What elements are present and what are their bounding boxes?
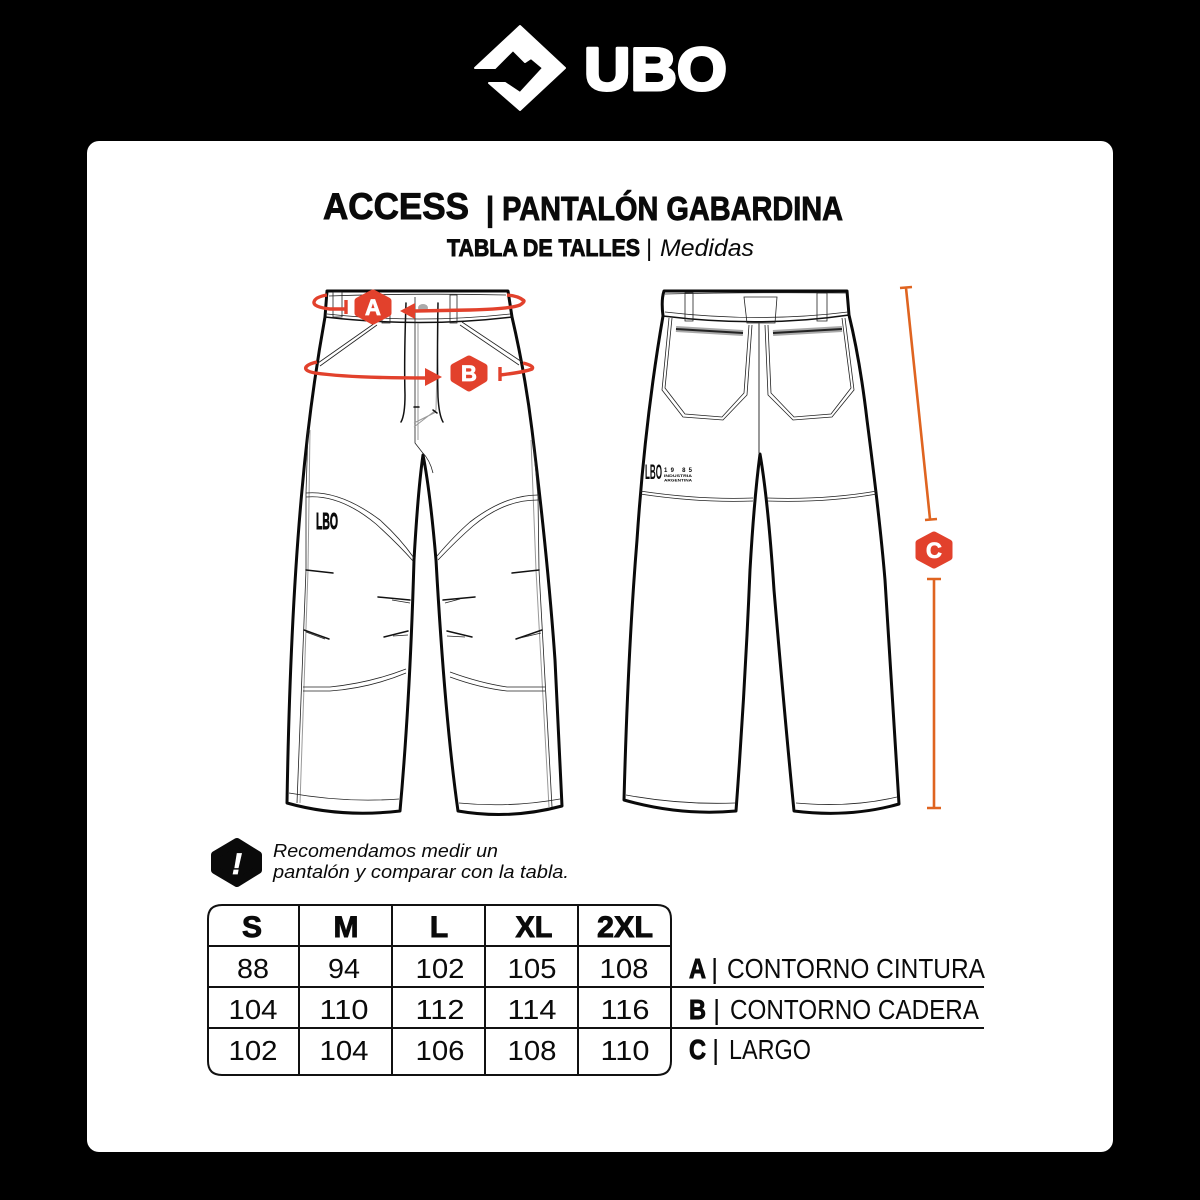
legend B: |: [713, 994, 720, 1025]
row C values: 102: [228, 1035, 278, 1066]
back label: LBO: [645, 461, 662, 484]
pockets: [318, 322, 522, 366]
label year: 19 85: [664, 468, 693, 474]
legend C: C: [689, 1034, 706, 1065]
icon: warning: [215, 842, 258, 883]
front pants drawing: [287, 291, 562, 815]
waistband: [325, 292, 512, 323]
back pockets: [662, 318, 854, 420]
subtitle: measures: Medidas: [660, 235, 754, 262]
size headers: L: [430, 911, 448, 944]
row A values: 105: [508, 953, 556, 984]
subtitle divider: |: [646, 235, 652, 262]
row A values: 102: [416, 953, 464, 984]
tip line one: Recomendamos medir un: [273, 841, 498, 861]
size headers: S: [242, 911, 262, 944]
length line upper: [900, 287, 937, 520]
badge C: [919, 535, 949, 565]
hip arrowhead: [425, 368, 442, 386]
title: [323, 186, 843, 262]
size headers: XL: [516, 911, 552, 944]
back outline: [624, 291, 899, 813]
tip line two: pantalón y comparar con la tabla.: [272, 862, 569, 882]
legend A: |: [711, 953, 718, 984]
legend A: A: [689, 953, 706, 984]
fly and pleats: [401, 297, 443, 473]
row B values: 112: [416, 994, 464, 1025]
waist end cap: [344, 300, 348, 314]
measure legend: [689, 953, 985, 1065]
label line one: INDUSTRIA: [664, 473, 692, 478]
hem stitching: [289, 793, 560, 805]
badge C: C: [926, 538, 942, 563]
row B values: 104: [228, 994, 278, 1025]
row C values: 108: [508, 1035, 556, 1066]
size headers: 2XL: [597, 911, 653, 944]
brand wordmark: UBO: [584, 36, 727, 103]
badge A: [358, 293, 388, 321]
side seams: [297, 430, 552, 807]
legend C: [689, 1034, 811, 1065]
hem stitching: [626, 795, 897, 805]
subtitle: TABLA DE TALLES: [447, 235, 640, 262]
row A values: [237, 953, 648, 984]
size headers: M: [334, 911, 358, 944]
size headers: [242, 911, 653, 944]
size table: [208, 905, 984, 1075]
knee panels: [306, 493, 540, 561]
title: product name: ACCESS: [323, 186, 469, 227]
row C values: 106: [416, 1035, 464, 1066]
center seam: [758, 323, 760, 453]
badge A: A: [365, 295, 381, 320]
table grid: [208, 905, 984, 1075]
knee darts: [304, 570, 542, 639]
callout: measuring tip: [215, 841, 569, 883]
row B values: 116: [600, 994, 650, 1025]
front outline: [287, 291, 562, 815]
back zips: [676, 329, 842, 333]
row B values: [228, 994, 650, 1025]
waistband: [663, 293, 849, 323]
legend B: B: [689, 994, 706, 1025]
arrow: waist contour: [314, 295, 524, 311]
measure A: waist: [314, 293, 524, 321]
badge B: B: [461, 361, 477, 386]
badge B: [454, 359, 484, 388]
legend C: LARGO: [729, 1034, 811, 1065]
size guide infographic: LBO: [316, 508, 338, 534]
row A values: 94: [328, 953, 360, 984]
icon: warning: !: [232, 848, 242, 881]
logo: [475, 26, 727, 110]
row A values: 108: [600, 953, 648, 984]
icon: diamond brand mark: [475, 26, 565, 110]
measure B: hip: [306, 359, 533, 388]
legend C: |: [712, 1034, 719, 1065]
legend A: CONTORNO CINTURA: [727, 953, 985, 984]
measure C: length: [900, 287, 949, 808]
panel: white card: [87, 141, 1113, 1152]
label line two: ARGENTINA: [664, 478, 692, 482]
yoke seam: [640, 491, 877, 501]
length line lower: [927, 579, 941, 808]
row B values: 110: [320, 994, 368, 1025]
lower leg seams: [303, 669, 545, 691]
legend B: CONTORNO CADERA: [730, 994, 979, 1025]
hip end cap: [498, 367, 502, 381]
row C values: 104: [320, 1035, 368, 1066]
arrow: hip contour: [306, 362, 533, 378]
row A values: 88: [237, 953, 269, 984]
waist arrowhead: [400, 303, 415, 319]
back pants drawing: [624, 291, 899, 813]
row C values: 110: [600, 1035, 650, 1066]
row B values: 114: [508, 994, 556, 1025]
title: product type: | PANTALÓN GABARDINA: [486, 190, 843, 227]
row C values: [228, 1035, 650, 1066]
